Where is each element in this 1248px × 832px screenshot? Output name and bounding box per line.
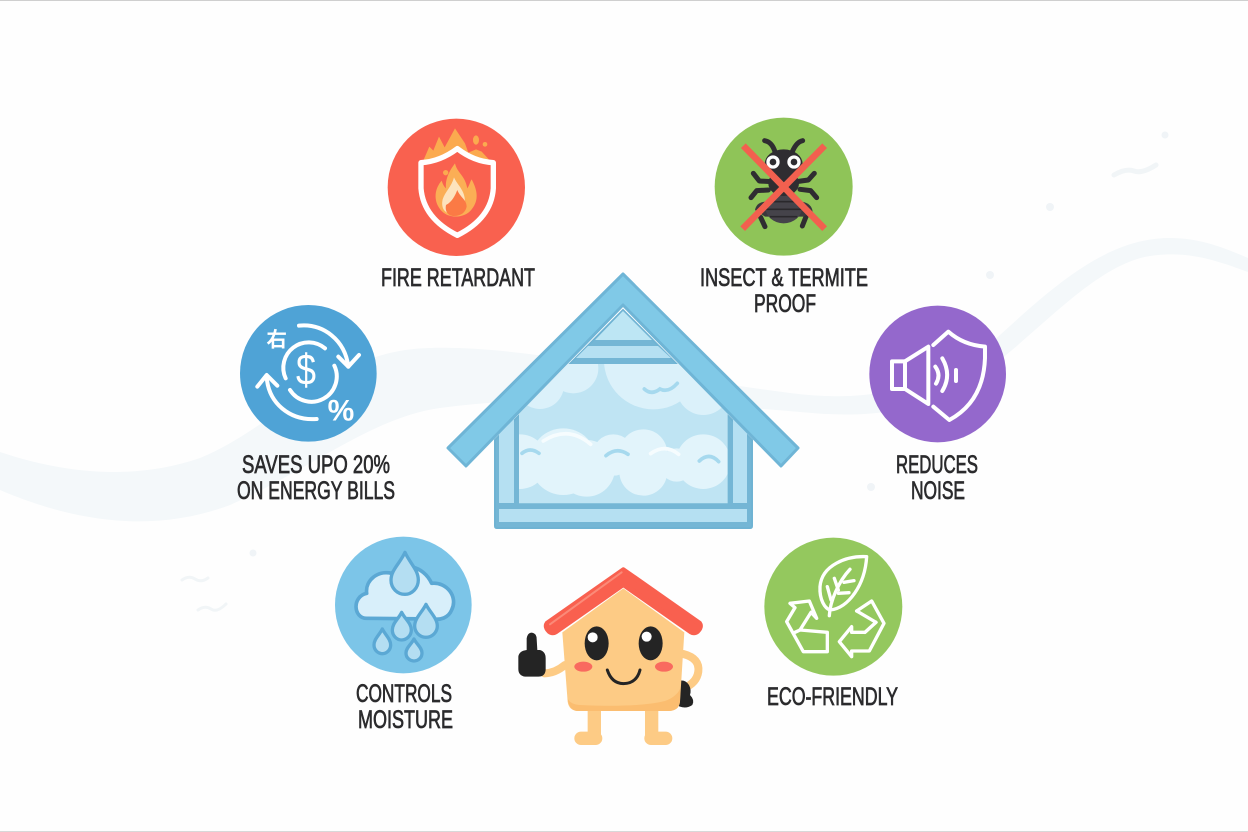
- icon: money cycle: [240, 305, 377, 442]
- panel: controls moisture: [335, 537, 472, 734]
- icon: speaker shield: [869, 306, 1006, 442]
- panel: energy savings: [237, 305, 395, 505]
- label: controls moisture: CONTROLS: [356, 680, 452, 708]
- smile: [607, 670, 640, 684]
- label: energy savings: SAVES UPO 20%: [242, 451, 390, 479]
- panel: insect proof: [700, 118, 868, 318]
- label: controls moisture: [356, 680, 453, 734]
- cheeks: [574, 662, 673, 672]
- panel: reduces noise: [869, 306, 1006, 505]
- icon: money cycle: $: [296, 346, 316, 394]
- label: energy savings: ON ENERGY BILLS: [237, 477, 395, 505]
- icon: rain cloud: [335, 537, 472, 673]
- upper insulation clouds: [528, 364, 722, 415]
- eyes: [585, 626, 663, 660]
- panel: fire retardant: [381, 119, 535, 292]
- house walls: [495, 310, 752, 528]
- label: reduces noise: [896, 451, 978, 505]
- label: eco-friendly: ECO-FRIENDLY: [767, 683, 898, 711]
- mascot: smiling house with thumbs up: [518, 570, 700, 745]
- label: fire retardant: FIRE RETARDANT: [381, 264, 535, 292]
- arms: [544, 654, 698, 688]
- label: insect and termite proof: PROOF: [754, 290, 816, 318]
- roof: [448, 274, 798, 466]
- background wave: [0, 238, 1248, 521]
- hands: [518, 633, 693, 708]
- label: reduces noise: NOISE: [911, 477, 965, 505]
- label: reduces noise: REDUCES: [896, 451, 978, 479]
- insulation fill: [519, 364, 728, 504]
- icon: fire shield: [388, 119, 525, 256]
- roof: [546, 570, 700, 633]
- icon: money cycle: %: [328, 394, 354, 427]
- label: insect and termite proof: INSECT & TERMITE: [700, 264, 868, 292]
- icon: leaf and recycle: [764, 538, 902, 676]
- wall studs: [499, 416, 747, 522]
- attic triangles: [595, 311, 652, 340]
- label: controls moisture: MOISTURE: [358, 706, 453, 734]
- body: [562, 588, 684, 711]
- background speckles: [182, 132, 1168, 610]
- label: energy savings: [237, 451, 395, 505]
- lower insulation clouds: [519, 428, 728, 496]
- icon: crossed insect: [715, 118, 853, 256]
- panel: eco-friendly: [764, 538, 902, 711]
- legs: [574, 705, 672, 745]
- label: insect and termite proof: [700, 264, 868, 318]
- central house cross-section: [448, 274, 798, 528]
- icon: money cycle: 右: [266, 329, 287, 352]
